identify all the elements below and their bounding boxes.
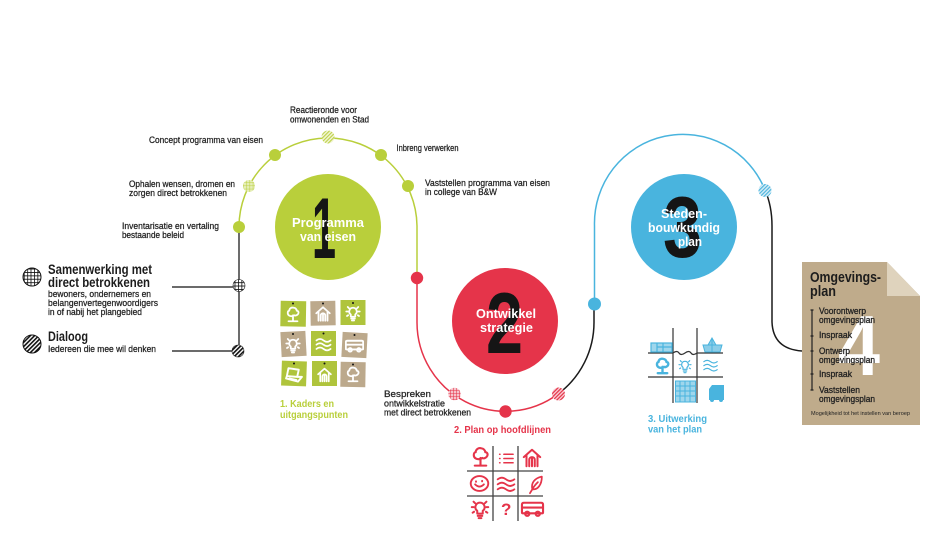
- circle 1 title: van eisen: [300, 229, 356, 244]
- circle 3: stedenbouwkundig plan: [631, 174, 737, 280]
- number 1: 1: [312, 181, 336, 277]
- number 2: 2: [486, 276, 523, 372]
- legend: dialoog: [23, 329, 156, 354]
- caption: kaders: 1. Kaders en: [280, 398, 334, 410]
- caption: kaders: [280, 398, 348, 421]
- step labels green route: Reactieronde voor: [290, 105, 357, 115]
- circle 1 title: [292, 215, 365, 244]
- step labels green route: omwonenden en Stad: [290, 114, 369, 124]
- step labels green route: zorgen direct betrokkenen: [129, 188, 227, 198]
- text: dialoog description: Iedereen die mee wil denken: [48, 344, 156, 354]
- heading: samenwerking: Samenwerking met: [48, 262, 152, 277]
- heading: dialoog: Dialoog: [48, 329, 88, 344]
- panel: hoofdlijnen icon grid: [467, 446, 543, 521]
- document steps: Vaststellen: [819, 385, 860, 395]
- text: bespreken: Bespreken: [384, 389, 431, 399]
- step labels green route: Inbreng verwerken: [396, 143, 458, 153]
- black connector 3 to document: [765, 190, 802, 351]
- text: bespreken: [384, 389, 471, 418]
- number 4: 4: [838, 299, 880, 394]
- timeline: [810, 310, 814, 390]
- step labels green route: [122, 105, 550, 240]
- caption: uitwerking: [648, 413, 707, 436]
- nodes red route: [411, 272, 565, 418]
- panel: omgevingsplan document: [802, 262, 920, 425]
- text: samenwerking description: in of nabij het plangebied: [48, 307, 142, 317]
- text: bespreken: ontwikkelstratie: [384, 398, 445, 408]
- caption: plan op hoofdlijnen: 2. Plan op hoofdlijnen: [454, 424, 551, 436]
- red route: [417, 278, 558, 411]
- circle 1 title: Programma: [292, 215, 365, 230]
- text: samenwerking description: bewoners, ondernemers en: [48, 289, 151, 299]
- blue route: [594, 134, 765, 304]
- circle 1: programma van eisen: [275, 174, 381, 280]
- circle 2 title: Ontwikkel: [476, 306, 536, 321]
- step labels green route: Concept programma van eisen: [149, 135, 263, 145]
- heading: samenwerking: [48, 262, 152, 290]
- caption: uitwerking: van het plan: [648, 424, 702, 436]
- heading: samenwerking: direct betrokkenen: [48, 275, 150, 290]
- circle 3 title: Steden-: [661, 206, 707, 221]
- circle 2: ontwikkelstrategie: [452, 268, 558, 374]
- nodes stakeholder line: [232, 280, 245, 357]
- document title: [810, 270, 881, 300]
- green route: [239, 138, 417, 278]
- document steps: omgevingsplan: [819, 394, 875, 404]
- panel: uitwerking icon grid: [648, 328, 724, 403]
- legend: samenwerking: [23, 262, 158, 317]
- document note: Mogelijkheid tot het instellen van beroep: [811, 411, 910, 417]
- step labels green route: bestaande beleid: [122, 230, 184, 240]
- document steps: omgevingsplan: [819, 355, 875, 365]
- step labels green route: Inventarisatie en vertaling: [122, 221, 219, 231]
- document steps: [819, 306, 875, 404]
- step labels green route: in college van B&W: [425, 187, 497, 197]
- black connector 2 to 3: [558, 304, 594, 394]
- circle 3 title: plan: [678, 234, 702, 249]
- document title: Omgevings-: [810, 270, 881, 286]
- circle 3 title: bouwkundig: [648, 220, 720, 235]
- document steps: omgevingsplan: [819, 315, 875, 325]
- text: bespreken: met direct betrokkenen: [384, 408, 471, 418]
- icon: grid circle: [23, 268, 41, 286]
- caption: kaders: uitgangspunten: [280, 409, 348, 421]
- document steps: Voorontwerp: [819, 306, 866, 316]
- document steps: Ontwerp: [819, 346, 850, 356]
- document steps: Inspraak: [819, 369, 852, 379]
- number 3: 3: [663, 180, 702, 276]
- text: samenwerking description: [48, 289, 158, 317]
- text: samenwerking description: belangenvertegenwoordigers: [48, 298, 158, 308]
- circle 3 title: [648, 206, 720, 249]
- panel: kaders icon tiles: [280, 300, 368, 387]
- step labels green route: Ophalen wensen, dromen en: [129, 179, 235, 189]
- circle 2 title: strategie: [480, 320, 533, 335]
- document fold: [887, 262, 920, 296]
- stakeholder line: [172, 228, 239, 351]
- icon: hatched circle: [23, 335, 41, 353]
- caption: uitwerking: 3. Uitwerking: [648, 413, 707, 425]
- document steps: Inspraak: [819, 330, 852, 340]
- panel: hoofdlijnen icon grid: ?: [501, 500, 511, 519]
- document title: plan: [810, 284, 836, 300]
- nodes blue route: [588, 184, 772, 310]
- nodes green route: [233, 130, 414, 233]
- step labels green route: Vaststellen programma van eisen: [425, 178, 550, 188]
- circle 2 title: [476, 306, 536, 335]
